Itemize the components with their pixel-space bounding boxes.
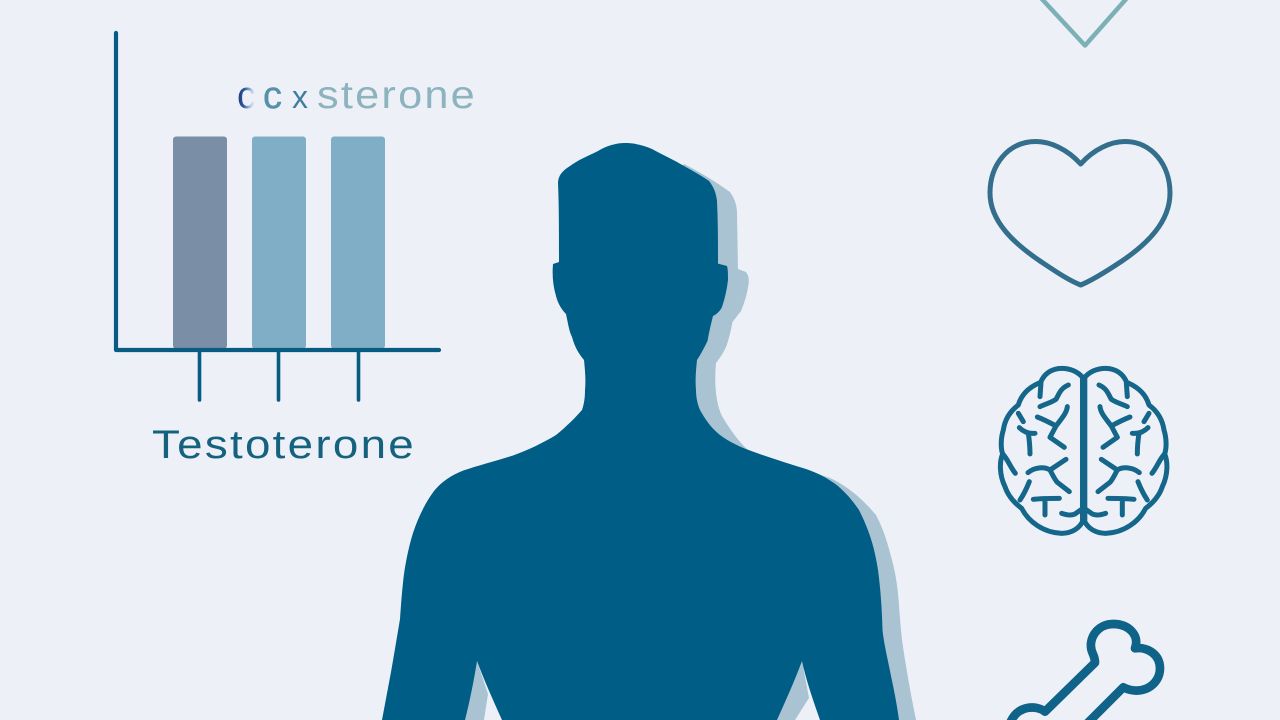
icon: bone: [1011, 624, 1160, 720]
chart heading: c: [237, 75, 256, 117]
bar 3: [331, 136, 385, 348]
brain centre line: [1073, 378, 1095, 520]
chart heading: c: [263, 75, 282, 117]
icon: human silhouette: [382, 143, 916, 720]
panel: testosterone bar chart: [116, 33, 477, 467]
axis ticks: [200, 350, 358, 400]
chart heading: x: [292, 79, 308, 115]
bar 1: [173, 136, 227, 348]
chart heading: sterone: [317, 74, 477, 117]
chart heading: [237, 74, 477, 117]
icon: brain: [1000, 368, 1167, 533]
icon: chevron: [1041, 0, 1127, 46]
silhouette: [382, 143, 899, 720]
brain left hemisphere: [1000, 368, 1083, 533]
brain right hemisphere: [1084, 368, 1167, 533]
bar 2: [252, 136, 306, 348]
chart axes: [116, 33, 439, 350]
icon: heart: [990, 142, 1170, 285]
silhouette shadow: [463, 164, 916, 720]
axis label: Testoterone: [152, 423, 416, 467]
